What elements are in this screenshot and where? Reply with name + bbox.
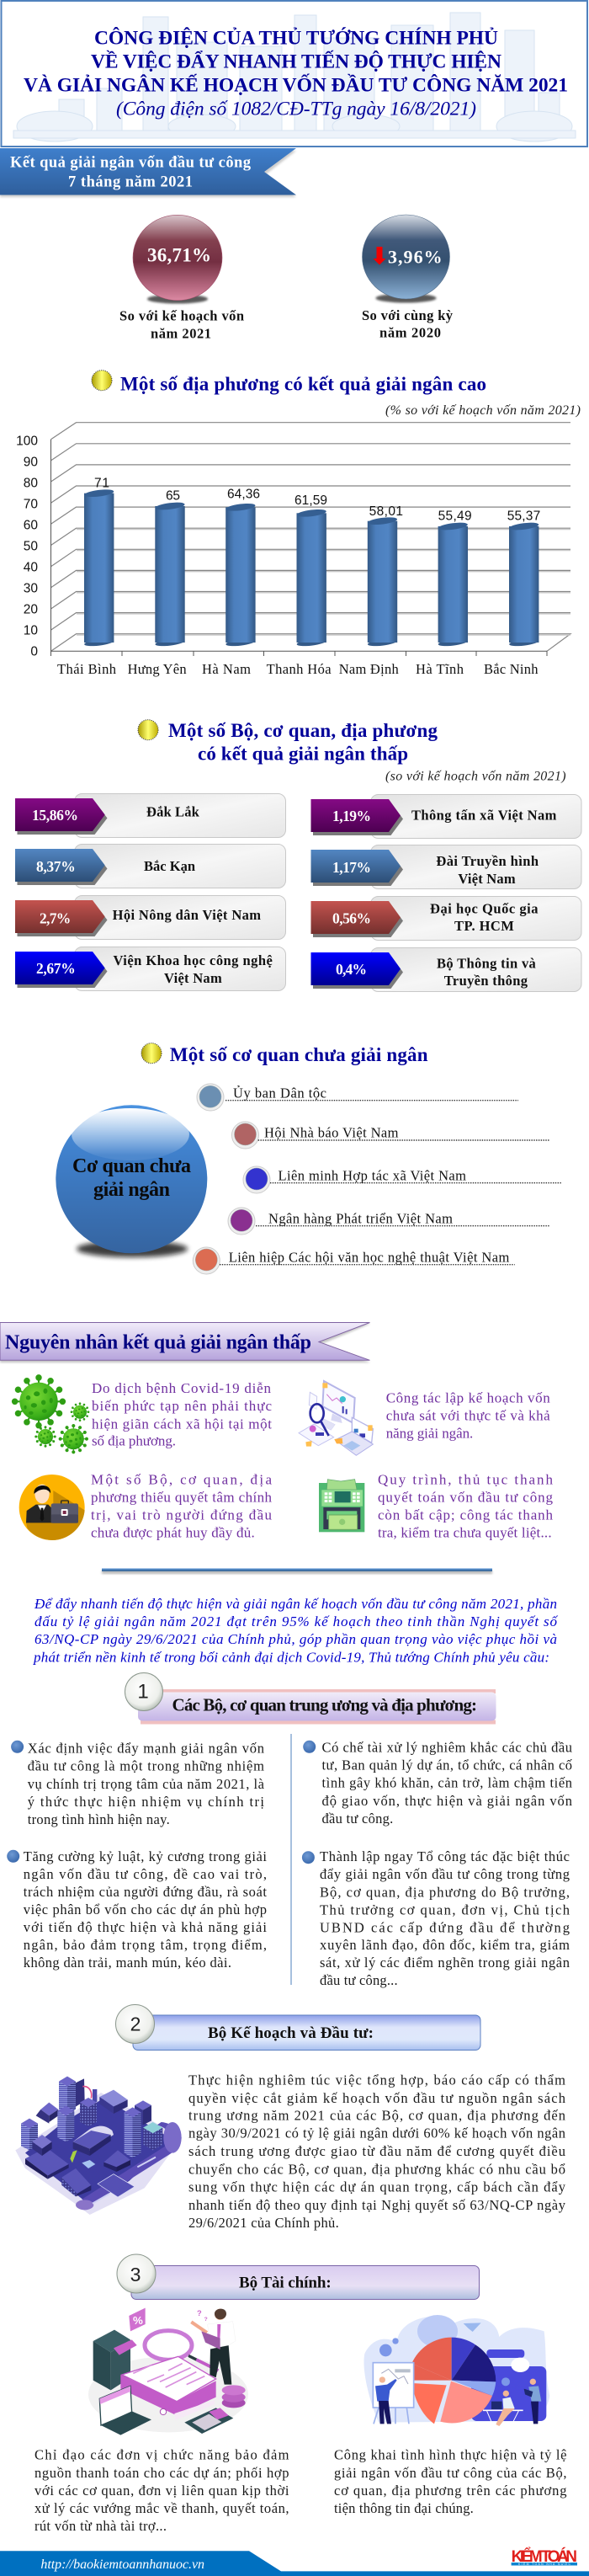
cause: procedures: Quy trình, thủ tục thanh [378,1471,554,1487]
title text: VỀ VIỆC ĐẨY NHANH TIẾN ĐỘ THỰC HIỆN [91,51,501,73]
bullet block: determine disbursement priority: đầu tư công là một trong những nhiệm [28,1758,264,1774]
section header 3: Bộ Tài chính: [239,2275,332,2292]
towers [59,2077,76,2087]
cause: covid: biến phức tạp nên phải thực [92,1398,272,1414]
bullet block: determine disbursement priority: vụ chính trị trọng tâm của năm 2021, là [28,1776,265,1792]
stat: 3,96% [362,215,454,341]
card: Viện Khoa học công nghệ Việt Nam: Việt Nam [164,970,222,986]
bullet block: discipline: không dàn trải, manh mún, kéo dài. [24,1955,231,1971]
banner: causes heading: Nguyên nhân kết quả giải ngân thấp [5,1331,311,1353]
bullet block: determine disbursement priority [11,1741,265,1827]
cause: procedures: còn bất cập; công tác thanh [378,1507,554,1523]
illustration: pie chart team [363,2315,549,2427]
intro paragraph: đấu tỷ lệ giải ngân năm 2021 đạt trên 95% kế hoạch theo tinh thần Nghị quyết số [34,1613,559,1629]
logo: KIỂM TOÁN NHÀ NƯỚC [518,2562,570,2566]
bullet block: sanctions [303,1740,572,1827]
text block: Ministry of Finance, right: cơ quan, địa phương trên các phương [334,2483,567,2499]
list item: Ngân hàng Phát triển Việt Nam: Ngân hàng Phát triển Việt Nam [268,1210,453,1226]
card: Hội Nông dân Việt Nam: Hội Nông dân Việt Nam [113,907,261,923]
bar chart [16,423,570,677]
icon: virus [13,1375,89,1453]
bullet block: sanctions: độ giao vốn, thực hiện và giải ngân vốn [321,1793,572,1809]
footer: http://baokiemtoannhanuoc.vn [40,2557,204,2572]
card: Bộ Thông tin và Truyền thông: Bộ Thông tin và [437,955,536,971]
card: Đắk Lắk: Đắk Lắk [146,803,200,819]
bullet block: task force: Thủ trưởng cơ quan, đơn vị, Chủ tịch [320,1901,570,1917]
cause: procedures: tra, kiểm tra chưa quyết liệt... [378,1524,552,1540]
illustration: smart city [15,2077,183,2215]
hub circle: giải ngân [93,1179,170,1201]
card: Hội Nông dân Việt Nam [15,896,286,940]
text block: Ministry of Finance, left: nguồn thanh toán cho các dự án; phối hợp [34,2465,289,2481]
card: Thông tấn xã Việt Nam [311,795,581,839]
bullet block: discipline: ngân, bảo đảm trọng tâm, trọng điểm, [24,1937,267,1953]
card: Đắk Lắk: 15,86% [32,807,78,824]
card: Đài Truyền hình Việt Nam: 1,17% [332,859,371,876]
bar: Bắc Ninh 55,37 [507,509,540,648]
cause: covid: số địa phương. [92,1433,176,1449]
bullet block: task force: xuyên lãnh đạo, đôn đốc, kiểm tra, giám [320,1937,570,1953]
card: Viện Khoa học công nghệ Việt Nam: Viện Khoa học công nghệ [113,952,273,968]
banner: results heading: Kết quả giải ngân vốn đầu tư công [10,154,252,171]
stat: 36,71%: So với kế hoạch vốn [119,308,244,324]
list item: Hội Nhà báo Việt Nam [232,1122,549,1149]
bullet block: task force: Thành lập ngay Tổ công tác đặc biệt thúc [320,1848,570,1864]
category labels: Hà Tĩnh [416,661,464,677]
bullet block: discipline: với tiến độ thực hiện và khả năng giải [24,1919,267,1935]
column divider [290,1734,292,1985]
cause: planning: chưa sát với thực tế và khả [386,1408,550,1424]
list item: Liên hiệp Các hội văn học nghệ thuật Việt Nam [193,1247,515,1274]
bar: Hưng Yên 65: 65 [166,488,180,503]
city background [13,13,576,141]
bullet block: task force: sát, xử lý các điểm nghẽn trong giải ngân [320,1955,570,1971]
bullet block: discipline: trách nhiệm của người đứng đầu, rà soát [24,1884,267,1900]
category labels: Thái Bình [57,661,117,677]
section header 2: Bộ Kế hoạch và Đầu tư: [208,2024,374,2042]
footer [0,2547,589,2576]
section header 1: Các Bộ, cơ quan trung ương và địa phương: [172,1694,477,1715]
cause: political will [91,1471,273,1540]
heading: low disbursement: Một số Bộ, cơ quan, địa phương [168,720,438,741]
text block: Ministry of Finance, right [334,2446,567,2516]
text block: Ministry of Planning: 29/6/2021 của Chính phủ. [188,2215,339,2231]
bar: Hà Nam 64,36 [226,487,260,648]
card: Viện Khoa học công nghệ Việt Nam: 2,67% [36,960,76,977]
text block: Ministry of Planning: nhanh tiến độ theo quy định tại Nghị quyết số 63/NQ-CP ngày [188,2197,566,2213]
intro paragraph [33,1596,559,1665]
card: Thông tấn xã Việt Nam: Thông tấn xã Việt Nam [411,807,557,823]
section header 2 [116,2004,480,2050]
category labels: Hưng Yên [128,661,187,677]
bar: Thanh Hóa 61,59 [294,493,327,648]
card: Đắk Lắk [15,793,286,837]
card: Thông tấn xã Việt Nam: 1,19% [332,808,371,824]
text block: Ministry of Finance, left: với các cơ quan, đơn vị liên quan kịp thời [34,2483,289,2499]
bullet block: determine disbursement priority: ý thức thực hiện nhiệm vụ chính trị [28,1794,264,1810]
illustration: audit documents [88,2308,248,2435]
text block: Ministry of Planning: sung vốn thực hiện các dự án quan trọng, cấp bách cần đẩy [188,2179,566,2195]
title text [24,27,568,120]
card: Đại học Quốc gia TP. HCM: Đại học Quốc gia [430,900,539,916]
cause: planning: Công tác lập kế hoạch vốn [386,1390,550,1406]
stat: 3,96%: So với cùng kỳ [362,307,454,323]
text block: Ministry of Finance, right: giải ngân vốn đầu tư công của các Bộ, [334,2465,567,2481]
section header 3 [117,2254,480,2299]
cause: procedures [378,1471,554,1540]
list item: Ủy ban Dân tộc [197,1084,518,1111]
list item: Ủy ban Dân tộc: Ủy ban Dân tộc [233,1085,326,1101]
illustration: audit documents: % [133,2314,143,2327]
title text: CÔNG ĐIỆN CỦA THỦ TƯỚNG CHÍNH PHỦ [94,27,498,50]
divider [102,1568,492,1574]
section header 2: 2 [130,2013,141,2035]
y labels: 30 [24,581,38,595]
banner: results heading [0,148,296,197]
bullet block: determine disbursement priority: Xác định việc đẩy mạnh giải ngân vốn [28,1741,264,1757]
banner: results heading: 7 tháng năm 2021 [68,173,193,190]
heading: high disbursement: Một số địa phương có kết quả giải ngân cao [120,373,486,394]
list item: Liên minh Hợp tác xã Việt Nam [243,1166,562,1193]
text block: Ministry of Finance, left [34,2446,289,2534]
bullet block: task force: đầu tư công... [320,1972,398,1988]
note: low disbursement unit: (so với kế hoạch vốn năm 2021) [385,770,566,784]
category labels: Nam Định [339,661,399,677]
title text: VÀ GIẢI NGÂN KẾ HOẠCH VỐN ĐẦU TƯ CÔNG NĂM 2021 [24,74,568,97]
text block: Ministry of Planning: Thực hiện nghiêm túc việc tổng hợp, báo cáo cấp có thẩm [188,2072,565,2088]
cause: procedures: quyết toán vốn đầu tư công [378,1489,554,1505]
card: Đại học Quốc gia TP. HCM: 0,56% [332,910,371,927]
bar: Hà Tĩnh 55,49 [438,509,472,648]
category labels: Thanh Hóa [267,661,332,677]
illustration: audit documents: ? [197,2309,202,2317]
intro paragraph: 63/NQ-CP ngày 29/6/2021 của Chính phủ, góp phần quan trọng vào việc phục hồi và [34,1631,557,1647]
card: Bắc Kạn: 8,37% [36,858,76,875]
card: Hội Nông dân Việt Nam: 2,7% [40,909,71,926]
bar: Nam Định 58,01: 58,01 [369,504,403,519]
bar: Hà Tĩnh 55,49: 55,49 [438,509,472,523]
y labels: 40 [24,560,38,574]
bullet block: sanctions: tư, Ban quản lý dự án, tổ chức, cá nhân cố [321,1757,572,1773]
y labels: 100 [16,434,38,448]
y labels: 0 [30,644,38,659]
bullet block: discipline: Tăng cường kỷ luật, kỷ cương trong giải [24,1848,267,1864]
cause: covid: hiện giãn cách xã hội tại một [92,1416,272,1432]
card: Viện Khoa học công nghệ Việt Nam [15,947,286,990]
cause: covid [92,1380,272,1449]
bar: Hà Nam 64,36: 64,36 [227,487,260,501]
text block: Ministry of Finance, left: rút vốn từ nhà tài trợ... [34,2518,167,2534]
cause: planning: năng giải ngân. [386,1425,473,1441]
card: Bộ Thông tin và Truyền thông: Truyền thông [444,973,528,989]
title text: (Công điện số 1082/CĐ-TTg ngày 16/8/2021) [116,99,476,120]
heading: low disbursement [138,720,438,765]
bullet block: task force [302,1848,570,1988]
icon: data analysis devices [299,1381,373,1455]
section header 3: 3 [130,2264,141,2285]
y labels: 80 [24,476,38,490]
icon: money counting machine [319,1480,364,1532]
list item: Liên hiệp Các hội văn học nghệ thuật Việt Nam: Liên hiệp Các hội văn học nghệ thuật Việt Nam [229,1249,510,1265]
stat: 36,71%: năm 2021 [151,326,211,342]
cause: political will: Một số Bộ, cơ quan, địa [91,1471,272,1487]
heading: not yet disbursed: Một số cơ quan chưa giải ngân [170,1044,428,1065]
list item: Liên minh Hợp tác xã Việt Nam: Liên minh Hợp tác xã Việt Nam [278,1168,466,1184]
y labels: 90 [24,455,38,469]
card: Đại học Quốc gia TP. HCM: TP. HCM [454,918,514,934]
bullet block: sanctions: đầu tư công. [321,1811,393,1827]
axes [50,440,547,656]
card: Đài Truyền hình Việt Nam [311,845,581,889]
text block: Ministry of Planning: quyền việc cắt giảm kế hoạch vốn đầu tư nguồn ngân sách [188,2090,566,2106]
bar: Hưng Yên 65 [155,488,185,648]
text block: Ministry of Planning: chuyển cho các Bộ, cơ quan, địa phương khác có nhu cầu bổ [188,2162,565,2178]
stat: 3,96%: năm 2020 [379,325,441,341]
card: Đại học Quốc gia TP. HCM [311,896,581,940]
bar: Thanh Hóa 61,59: 61,59 [294,493,327,508]
card: Đài Truyền hình Việt Nam: Đài Truyền hình [436,853,539,869]
bullet block: sanctions: Có chế tài xử lý nghiêm khắc các chủ đầu [321,1740,572,1756]
stat: 36,71% [119,215,244,342]
section header 1 [125,1672,496,1725]
text block: Ministry of Finance, left: Chỉ đạo các đơn vị chức năng bảo đảm [34,2446,289,2462]
card: Bộ Thông tin và Truyền thông [311,948,581,992]
cause: political will: phương thiếu quyết tâm chính [91,1489,273,1505]
y labels: 10 [24,623,38,637]
bar: Bắc Ninh 55,37: 55,37 [507,509,540,523]
category labels [57,661,539,677]
bar: Nam Định 58,01 [367,504,403,648]
cause: political will: chưa được phát huy đầy đủ. [91,1524,255,1540]
cause: political will: trị, vai trò người đứng đầu [91,1507,273,1523]
text block: Ministry of Planning [188,2072,566,2231]
section header 1: 1 [137,1681,149,1704]
hub circle: Cơ quan chưa [72,1155,191,1177]
bullet block: discipline: ngân vốn đầu tư công, đề cao vai trò, [24,1866,267,1882]
bar: Thái Bình 71 [84,476,114,648]
intro paragraph: Để đẩy nhanh tiến độ thực hiện và giải ngân kế hoạch vốn đầu tư công năm 2021, phần [34,1596,557,1612]
icon: down arrow [374,247,385,264]
hub circle [56,1105,207,1257]
list item: Hội Nhà báo Việt Nam: Hội Nhà báo Việt Nam [264,1125,399,1141]
bullet block: discipline: việc phân bổ vốn cho các dự án phù hợp [24,1901,267,1917]
stat: 3,96%: 3,96% [388,247,443,268]
bullet block: sanctions: tình gây khó khăn, cản trở, làm chậm tiến [321,1775,572,1791]
card: Bộ Thông tin và Truyền thông: 0,4% [336,961,367,978]
text block: Ministry of Finance, left: xử lý các vướng mắc về thanh, quyết toán, [34,2500,289,2516]
bullet block: determine disbursement priority: trong tình hình hiện nay. [28,1811,170,1827]
card: Bắc Kạn [15,844,286,888]
y labels: 60 [24,518,38,532]
cause: covid: Do dịch bệnh Covid-19 diễn [92,1380,271,1396]
icon: businessman [19,1475,85,1540]
bullet block: discipline [7,1848,267,1971]
bullet block: task force: UBND các cấp đứng đầu để thường [320,1919,570,1935]
category labels: Hà Nam [202,661,251,677]
logo: KIỂM TOÁN [512,2547,577,2566]
category labels: Bắc Ninh [484,661,539,677]
bar: Thái Bình 71: 71 [94,476,109,490]
title panel [2,1,587,147]
y labels: 20 [24,602,38,616]
stat: 36,71%: 36,71% [147,245,211,266]
banner: causes heading [0,1322,370,1363]
heading: low disbursement: có kết quả giải ngân thấp [198,744,408,765]
note: unit: (% so với kế hoạch vốn năm 2021) [385,403,581,418]
card: Bắc Kạn: Bắc Kạn [144,858,195,874]
card: Đài Truyền hình Việt Nam: Việt Nam [458,871,516,887]
y labels: 70 [24,497,38,511]
y labels [16,434,38,659]
grid [50,423,570,651]
list item: Ngân hàng Phát triển Việt Nam [228,1208,549,1235]
text block: Ministry of Planning: ngày 30/9/2021 có tỷ lệ giải ngân dưới 60% kế hoạch vốn ngân [188,2125,565,2141]
text block: Ministry of Planning: sách trung ương được giao từ đầu năm để cương quyết điều [188,2143,565,2159]
bullet block: task force: đẩy giải ngân vốn đầu tư công trong từng [320,1866,570,1882]
cause: planning [386,1390,550,1441]
y labels: 50 [24,539,38,553]
bullet block: task force: Bộ, cơ quan, địa phương do Bộ trưởng, [320,1884,570,1900]
text block: Ministry of Planning: trung ương năm 2021 của các Bộ, cơ quan, địa phương đến [188,2108,565,2124]
illustration: audit documents: ? [204,2317,208,2323]
intro paragraph: phát triển nền kinh tế trong bối cảnh đại dịch Covid-19, Thủ tướng Chính phủ yêu cầu: [33,1649,549,1665]
text block: Ministry of Finance, right: Công khai tình hình thực hiện và tỷ lệ [334,2446,567,2462]
text block: Ministry of Finance, right: tiện thông tin đại chúng. [334,2500,474,2516]
